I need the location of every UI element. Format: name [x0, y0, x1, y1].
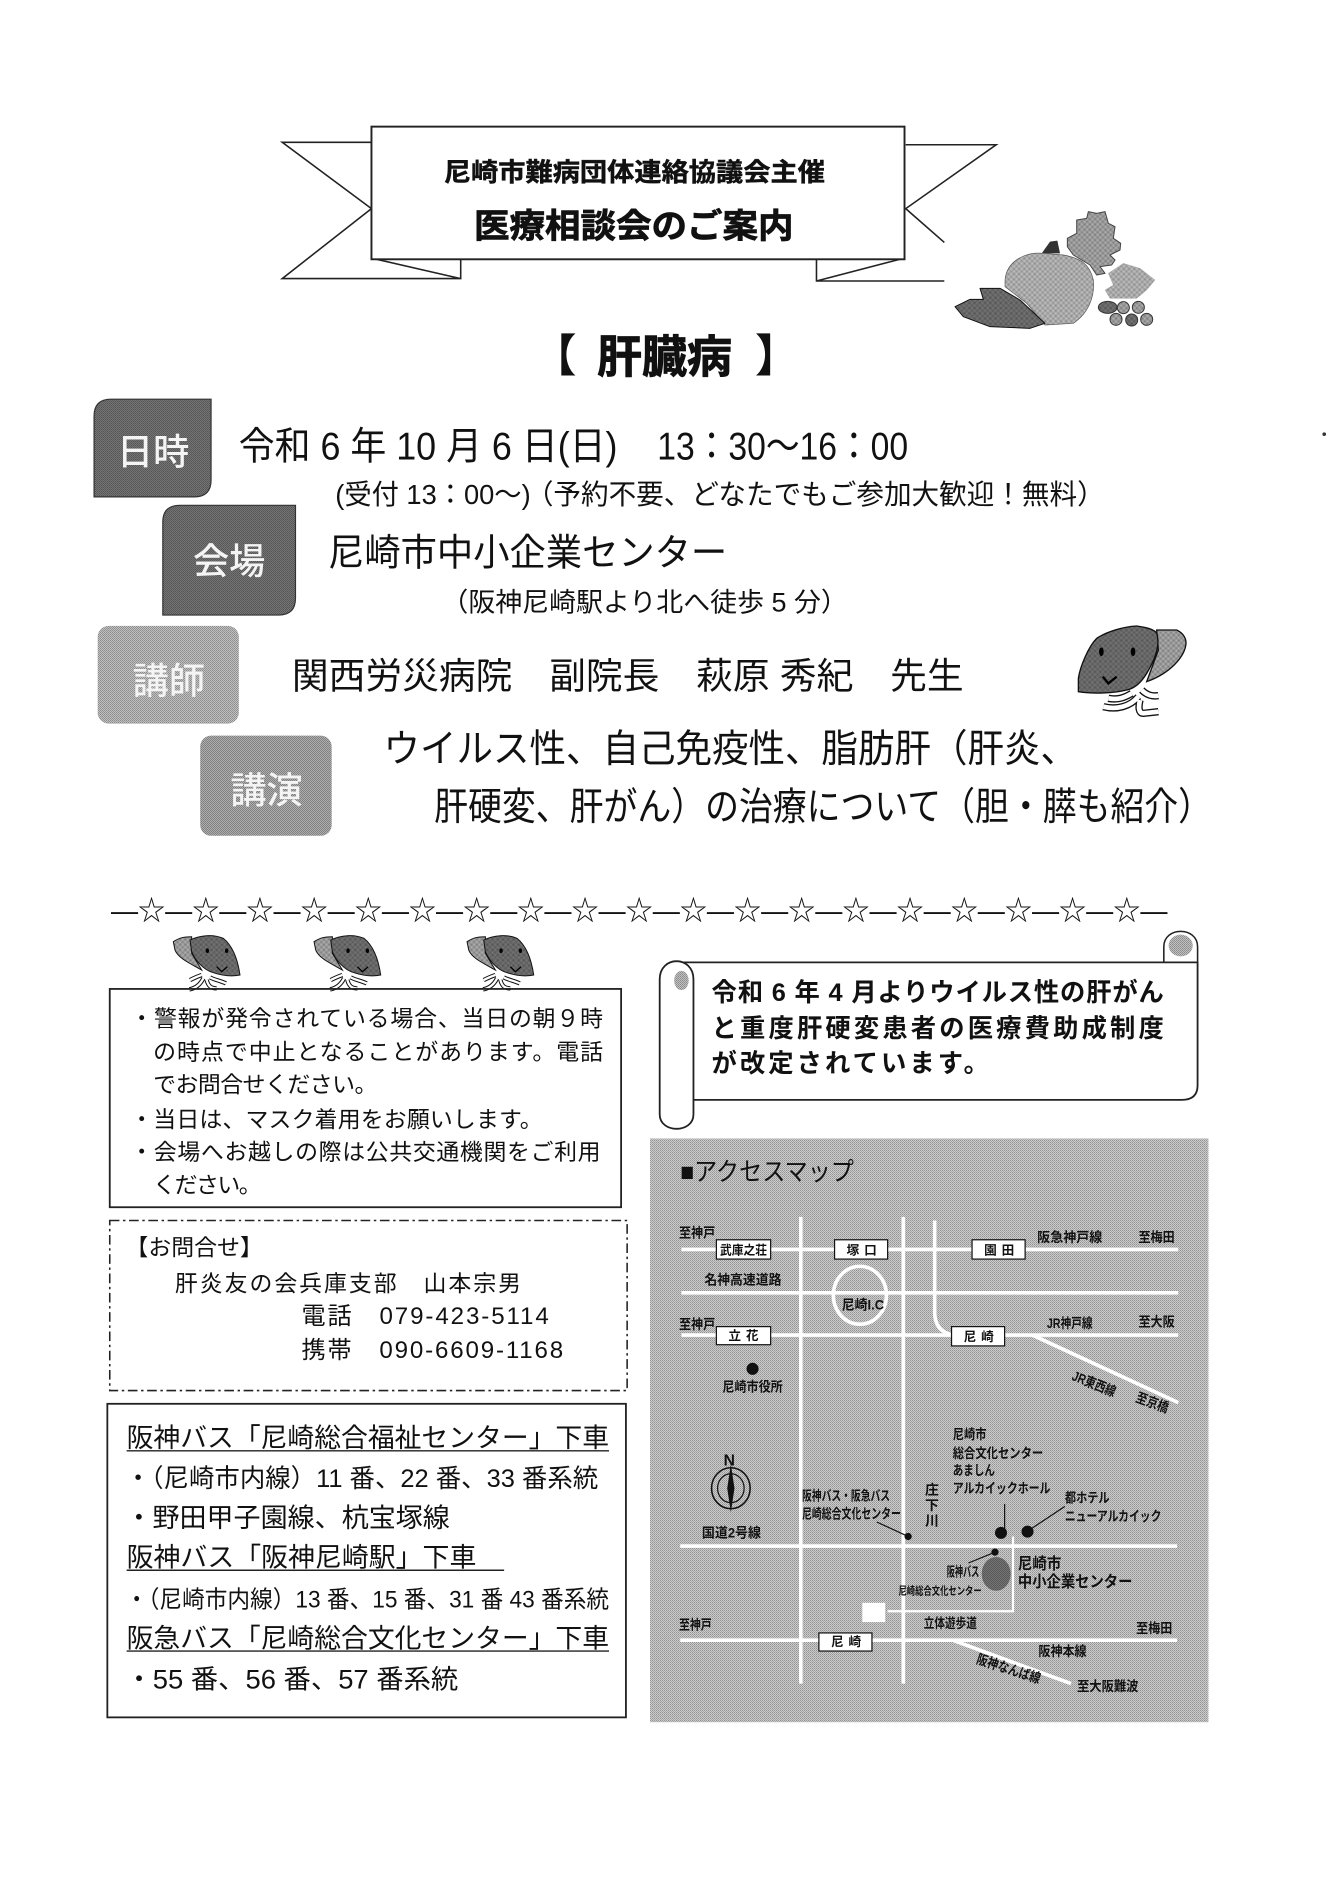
- station: Mukonoso: 武庫之荘: [720, 1242, 767, 1257]
- station: JR Amagasaki: [952, 1327, 1005, 1346]
- map line labels: 阪急神戸線: [1037, 1229, 1102, 1245]
- station: Tsukaguchi: [835, 1240, 888, 1259]
- icon: compass: [712, 1452, 750, 1512]
- map line labels: 至神戸: [679, 1224, 715, 1240]
- label: lecture: [200, 736, 332, 836]
- row: venue: 会場: [193, 541, 265, 582]
- icon: compass: N: [724, 1452, 735, 1469]
- station: Tsukaguchi: 塚口: [847, 1243, 877, 1257]
- map landmark labels: 中小企業センター: [1018, 1572, 1132, 1591]
- label: lecturer: [98, 626, 239, 724]
- map line labels: 阪神なんば線: [975, 1651, 1043, 1686]
- map landmark labels: あましん: [953, 1462, 995, 1478]
- icon: small liver mascot 1: [173, 936, 240, 989]
- map line labels: 至梅田: [1138, 1229, 1175, 1245]
- ribbon right wing: [816, 145, 996, 281]
- scroll right roll: [1164, 931, 1198, 965]
- map line labels: JR神戸線: [1047, 1315, 1093, 1331]
- map landmark labels: 尼崎総合文化センター: [802, 1505, 901, 1521]
- ribbon left wing: [282, 142, 461, 279]
- station: Hanshin Amagasaki: [819, 1633, 872, 1651]
- reception note: (受付 13：00～): [335, 479, 531, 510]
- illustration: autumn fruits: [955, 212, 1155, 328]
- station: Sonoda: [972, 1240, 1025, 1259]
- panel: notices: [110, 989, 621, 1207]
- bus routes 3: ・（尼崎市内線）13 番、15 番、31 番 43 番系統: [125, 1587, 609, 1614]
- icon: large liver mascot: [1078, 626, 1186, 713]
- light fruit: [1105, 263, 1155, 298]
- venue name: 尼崎市中小企業センター: [328, 532, 727, 574]
- station: JR Amagasaki: 尼崎: [964, 1329, 994, 1344]
- map line labels: 阪神本線: [1038, 1643, 1087, 1659]
- stem: [1042, 241, 1060, 253]
- bus stop 1: 阪神バス「尼崎総合福祉センター」下車: [127, 1423, 609, 1453]
- map line labels: 至神戸: [679, 1616, 712, 1632]
- notice 1 continued: の時点で中止となることがあります。電話: [153, 1039, 603, 1065]
- callout: scroll notice: [660, 931, 1198, 1129]
- bus stop 3: 阪急バス「尼崎総合文化センター」下車: [127, 1623, 609, 1653]
- map markers: [747, 1363, 1065, 1563]
- station: Sonoda: 園田: [984, 1243, 1014, 1257]
- map landmark labels: [802, 1426, 1161, 1597]
- station: Hanshin Amagasaki: 尼崎: [831, 1634, 861, 1649]
- panel: bus directions: [107, 1404, 626, 1717]
- map landmark labels: 川: [925, 1513, 939, 1529]
- event title: 医療相談会のご案内: [474, 208, 794, 246]
- star divider: —☆—☆—☆—☆—☆—☆—☆—☆—☆—☆—☆—☆—☆—☆—☆—☆—☆—☆—☆—: [111, 895, 1168, 926]
- scroll text line 1: 令和 6 年 4 月よりウイルス性の肝がん: [712, 978, 1164, 1007]
- map line labels: 至梅田: [1136, 1620, 1172, 1636]
- scroll left roll: [660, 961, 693, 1129]
- map heading: ■アクセスマップ: [680, 1159, 854, 1187]
- topic line 1: ウイルス性、自己免疫性、脂肪肝（肝炎、: [384, 728, 1077, 771]
- scroll body: [675, 962, 1198, 1100]
- contact mobile: 携帯 090-6609-1168: [302, 1337, 563, 1364]
- heading: liver disease: 】: [755, 332, 800, 381]
- heading: liver disease: [532, 332, 800, 383]
- leaf: [1067, 212, 1121, 275]
- bus routes 2: ・野田甲子園線、杭宝塚線: [125, 1503, 450, 1533]
- map line labels: 至大阪: [1138, 1314, 1175, 1330]
- map line labels: 国道2号線: [702, 1525, 761, 1541]
- map white block: [862, 1603, 885, 1622]
- sweet potato: [955, 288, 1045, 328]
- pumpkin: [1005, 253, 1094, 325]
- row: date and time: 日時: [117, 431, 189, 472]
- label: date: [94, 399, 211, 497]
- label: venue: [163, 505, 295, 615]
- panel: access map: [650, 1138, 1208, 1722]
- map line labels: 至神戸: [679, 1316, 715, 1332]
- stray scan mark: [1322, 432, 1326, 436]
- map line labels: JR東西線: [1070, 1368, 1118, 1400]
- row: lecturer: [98, 626, 964, 724]
- map landmark labels: 阪神バス: [947, 1563, 979, 1579]
- station: Tachibana: [716, 1327, 771, 1345]
- reception note: （予約不要、どなたでもご参加大歓迎！無料）: [526, 479, 1105, 510]
- contact heading: 【お問合せ】: [125, 1234, 263, 1260]
- map line labels: 至大阪難波: [1077, 1678, 1139, 1694]
- notice 1: ・警報が発令されている場合、当日の朝９時: [130, 1005, 603, 1031]
- row: venue: [163, 505, 848, 617]
- grapes: [1098, 301, 1153, 326]
- map landmark labels: 尼崎市: [953, 1426, 987, 1442]
- topic line 2: 肝硬変、肝がん）の治療について（胆・膵も紹介）: [434, 786, 1212, 829]
- bus routes 1: ・（尼崎市内線）11 番、22 番、33 番系統: [125, 1465, 598, 1493]
- map landmark labels: アルカイックホール: [953, 1480, 1051, 1496]
- station: Tachibana: 立花: [728, 1328, 759, 1343]
- map landmark labels: 総合文化センター: [953, 1445, 1043, 1461]
- map line labels: [679, 1224, 1175, 1694]
- map landmark labels: 尼崎総合文化センター: [898, 1583, 982, 1597]
- map line labels: 至京橋: [1134, 1389, 1171, 1416]
- contact phone: 電話 079-423-5114: [302, 1303, 549, 1330]
- panel: contact: [110, 1220, 627, 1391]
- date text: 令和 6 年 10 月 6 日(日): [239, 425, 617, 468]
- map landmark labels: 下: [925, 1497, 939, 1513]
- row: date and time: [94, 399, 1105, 510]
- heading: liver disease: 【: [532, 332, 576, 381]
- row: lecturer: 講師: [133, 660, 205, 701]
- banner: title ribbon: [282, 127, 996, 281]
- map landmark labels: 都ホテル: [1065, 1490, 1110, 1506]
- map landmark labels: 庄: [925, 1481, 939, 1497]
- lecturer name: 関西労災病院 副院長 萩原 秀紀 先生: [292, 656, 964, 697]
- venue marker: [982, 1557, 1011, 1591]
- map line labels: 立体遊歩道: [924, 1615, 977, 1631]
- map landmark labels: ニューアルカイック: [1065, 1508, 1161, 1524]
- scroll text line 3: が改定されています。: [712, 1049, 989, 1078]
- map roads: [680, 1217, 1178, 1684]
- organiser line: 尼崎市難病団体連絡協議会主催: [444, 159, 825, 187]
- map line labels: 尼崎I.C: [842, 1297, 884, 1313]
- scroll text line 2: と重度肝硬変患者の医療費助成制度: [712, 1015, 1164, 1043]
- date text: [239, 425, 908, 468]
- map line labels: 尼崎市役所: [722, 1379, 783, 1395]
- icon: small liver mascot 3: [467, 936, 534, 989]
- row: lecture topic: [200, 728, 1212, 836]
- bus routes 4: ・55 番、56 番、57 番系統: [125, 1664, 458, 1694]
- row: lecture topic: 講演: [230, 770, 303, 811]
- notice 3 end: ください。: [153, 1172, 262, 1198]
- icon: small liver mascot 2: [314, 936, 381, 989]
- map landmark labels: 尼崎市: [1018, 1554, 1062, 1573]
- notice 3: ・会場へお越しの際は公共交通機関をご利用: [130, 1139, 601, 1165]
- map line labels: 名神高速道路: [704, 1271, 782, 1287]
- heading: liver disease: 肝臓病: [597, 334, 732, 383]
- map landmark labels: 阪神バス・阪急バス: [802, 1487, 890, 1503]
- venue directions: （阪神尼崎駅より北へ徒歩 5 分）: [441, 587, 848, 617]
- notice 1 end: でお問合せください。: [153, 1072, 377, 1098]
- contact organisation: 肝炎友の会兵庫支部 山本宗男: [175, 1271, 521, 1297]
- date text: 13：30～16：00: [657, 425, 908, 468]
- bus stop 2: 阪神バス「阪神尼崎駅」下車: [127, 1543, 476, 1573]
- station: Mukonoso: [716, 1240, 771, 1259]
- notice 2: ・当日は、マスク着用をお願いします。: [130, 1107, 543, 1133]
- ribbon main panel: [371, 127, 905, 259]
